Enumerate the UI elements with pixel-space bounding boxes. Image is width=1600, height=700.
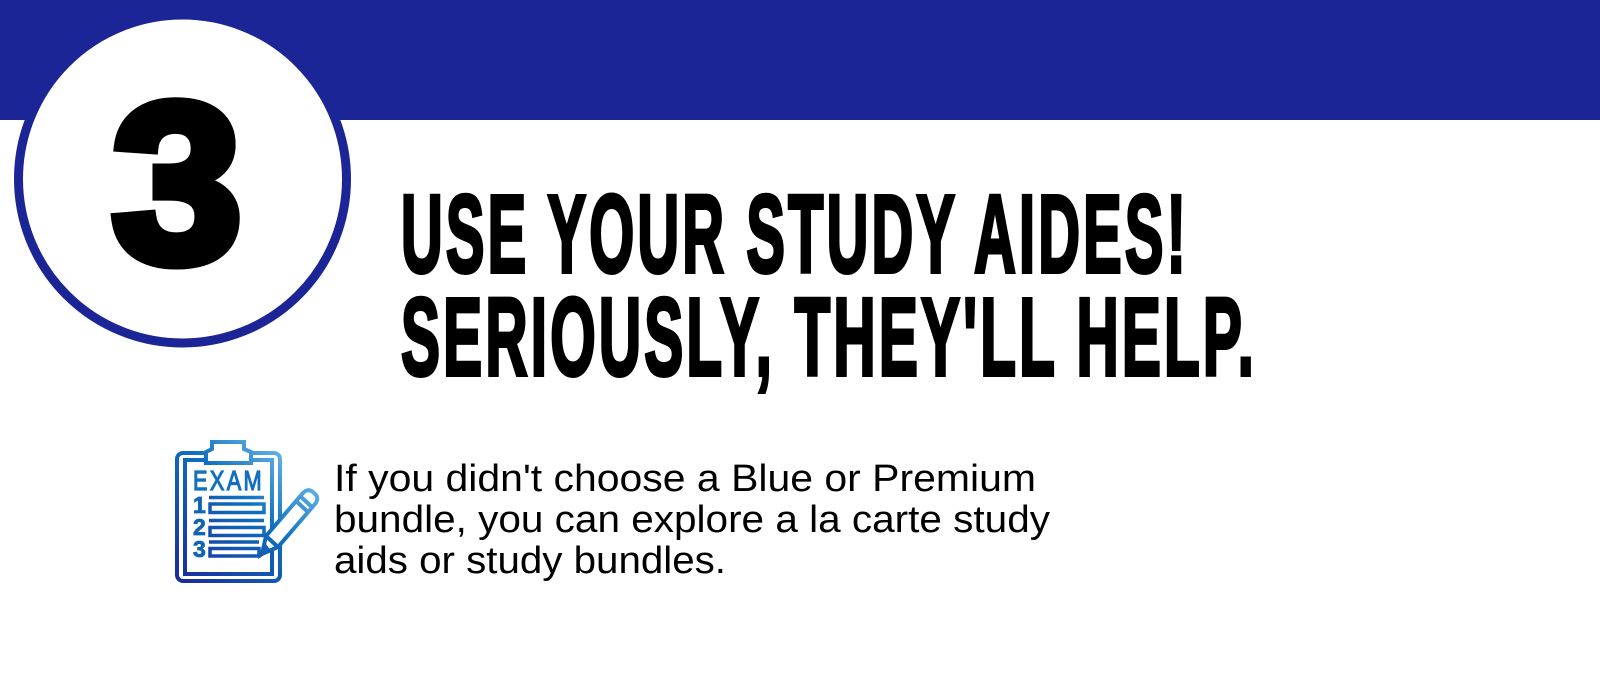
- pencil: [262, 490, 317, 554]
- body line 2: bundle, you can explore a la carte study: [334, 499, 1050, 541]
- clipboard inner sheet: [185, 460, 272, 574]
- clipboard board: [177, 453, 280, 581]
- number 3: 3: [112, 56, 242, 309]
- list numbers: [193, 492, 206, 562]
- icon: exam clipboard and pencil: [177, 442, 317, 581]
- heading: [401, 173, 1257, 399]
- list numbers: 3: [193, 536, 206, 562]
- exam label: EXAM: [193, 465, 264, 496]
- body line 3: aids or study bundles.: [334, 540, 726, 582]
- number badge: [18, 15, 346, 343]
- list lines: [209, 498, 264, 556]
- body text: [334, 458, 1050, 582]
- list numbers: 2: [193, 514, 206, 540]
- body line 1: If you didn't choose a Blue or Premium: [334, 458, 1036, 500]
- top banner: [0, 0, 1600, 120]
- badge circle: [18, 15, 346, 343]
- clipboard clip: [206, 442, 251, 463]
- list numbers: 1: [193, 492, 206, 518]
